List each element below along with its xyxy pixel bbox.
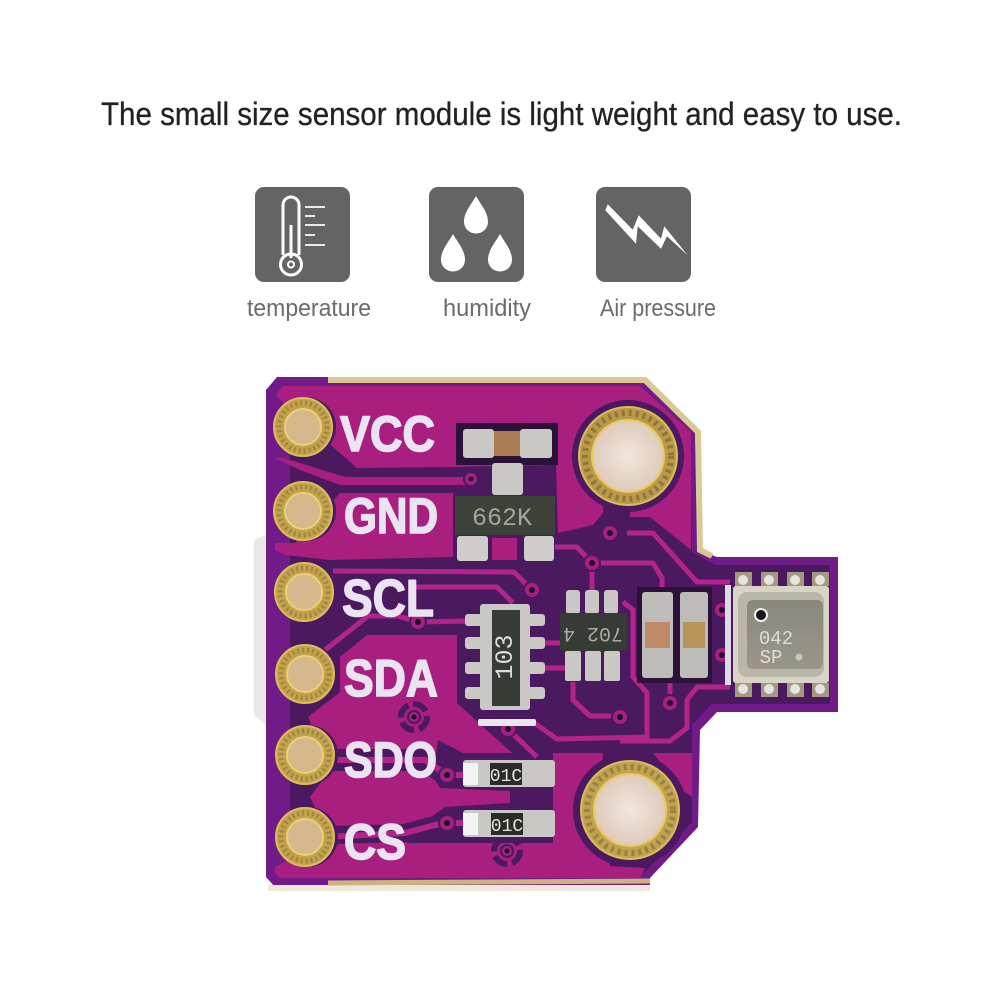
vias (408, 472, 730, 857)
pin label: GND: GND (344, 488, 438, 544)
component: transistor 662K (455, 463, 555, 561)
icon: temperature (255, 187, 350, 282)
mounting hole: bottom (581, 761, 679, 859)
label: humidity: humidity (443, 295, 531, 322)
copper traces (325, 533, 730, 837)
icon: humidity (429, 187, 524, 282)
pin label: SDA: SDA (344, 650, 438, 708)
component: top capacitor (456, 423, 558, 465)
mounting hole ring shadows (572, 400, 684, 512)
component: IC 702 (560, 590, 627, 681)
component: IC 702: 702 4 (563, 621, 623, 644)
component: resistor array 103: 103 (491, 634, 520, 680)
label: temperature: temperature (247, 295, 371, 322)
component: capacitor pair (637, 587, 712, 683)
component: resistor 01C lower: 01C (491, 817, 523, 837)
icon: air pressure (596, 187, 691, 282)
component: resistor array 103 (465, 604, 545, 726)
mounting hole: top (579, 407, 677, 505)
component: resistor 01C upper: 01C (490, 767, 522, 787)
title: The small size sensor module is light weight and easy to use. (101, 96, 902, 132)
pin label: CS: CS (344, 814, 406, 870)
pin label: SCL: SCL (342, 570, 434, 628)
label: air pressure: Air pressure (600, 295, 716, 322)
pin label: VCC: VCC (340, 406, 435, 462)
solder pads: pin holes (274, 397, 338, 867)
copper pours (275, 386, 692, 878)
component: BME280 sensor (725, 572, 829, 697)
dark substrate (290, 388, 830, 872)
component: transistor 662K: 662K (472, 504, 532, 533)
component: resistor 01C lower (463, 810, 555, 837)
pin label: SDO: SDO (344, 732, 437, 788)
via thermal reliefs (401, 704, 520, 864)
component: BME280 sensor: 042 (759, 628, 793, 650)
component: resistor 01C upper (463, 760, 555, 787)
sensor circuit board (254, 377, 838, 888)
component: BME280 sensor: SP (760, 647, 782, 669)
